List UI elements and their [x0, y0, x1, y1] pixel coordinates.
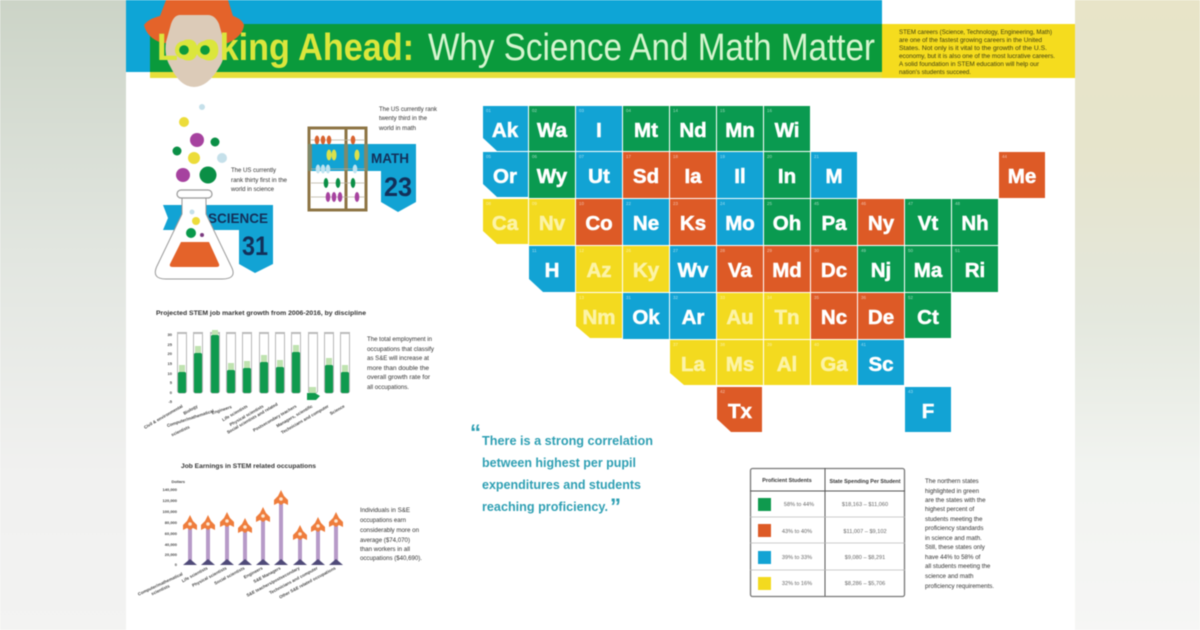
table caption: have 44% to 58% of: [925, 554, 981, 561]
tile: Oh: 25: [767, 201, 772, 206]
chart: earnings rockets: Technicians and computer: [268, 565, 319, 595]
math caption: world in math: [378, 125, 417, 132]
tile: Ma: [905, 246, 951, 292]
bar chart: job growth test tubes: Physical scientists: [229, 403, 265, 427]
left page margin: [0, 0, 126, 630]
earnings caption: Individuals in S&E: [360, 507, 410, 514]
tile: Md: 29: [767, 248, 772, 253]
bar chart: job growth test tubes: 25: [168, 342, 173, 347]
pull quote: expenditures and students: [482, 478, 641, 492]
bar chart: job growth test tubes: 0: [170, 390, 173, 395]
tile: Ca: 08: [486, 201, 491, 206]
tile: Sc: Sc: [868, 353, 894, 376]
tile: Dc: [811, 246, 857, 292]
chart: earnings rockets: 80,000: [165, 520, 178, 525]
tile: Wv: Wv: [678, 259, 709, 282]
bar chart: job growth test tubes: Postsecondary teachers: [252, 403, 298, 433]
tile: Me: 44: [1002, 154, 1007, 159]
tile: De: 36: [861, 295, 866, 300]
tile: Me: [999, 152, 1045, 198]
table caption: science and math: [925, 573, 974, 580]
table caption: highlighted in green: [925, 488, 980, 495]
tile: Ms: Ms: [726, 353, 754, 376]
tile: Ok: [623, 293, 669, 339]
earnings caption: [360, 507, 422, 562]
pull quote: reaching proficiency.: [482, 500, 608, 514]
tile: Ky: [623, 246, 669, 292]
science caption: rank thirty first in the: [231, 177, 288, 184]
tile: Mn: [717, 106, 763, 151]
tile: Ok: Ok: [632, 306, 660, 329]
icon: abacus: [308, 128, 368, 210]
tile: Ut: Ut: [588, 165, 610, 188]
chart: earnings rockets: 120,000: [163, 498, 178, 503]
tile: Nj: 49: [861, 248, 866, 253]
tile: Nj: [858, 246, 904, 292]
pull quote: [470, 420, 653, 519]
math caption: [378, 106, 438, 132]
tile: Ks: 23: [673, 201, 678, 206]
icon: bubbling flask: [155, 104, 233, 279]
chart: earnings rockets: Social scientists: [213, 565, 246, 586]
science ribbon: SCIENCE: [208, 210, 268, 226]
chart: earnings rockets: S&E teachers/postsecondary: [246, 565, 301, 598]
intro text: are one of the fastest growing careers in the United: [899, 37, 1042, 44]
tile: Ga: [811, 340, 857, 385]
tile: Va: 28: [720, 248, 725, 253]
tile: M: [811, 152, 857, 198]
tile: La: La: [681, 353, 706, 376]
tile: Ak: 01: [486, 108, 491, 113]
table: proficiency and spending: Proficient Students: [762, 478, 812, 484]
chart: earnings rockets: Life scientists: [181, 565, 209, 583]
table caption: proficiency standards: [925, 525, 983, 532]
tile: Al: 39: [767, 342, 772, 347]
chart: earnings rockets: S&E Managers: [253, 565, 282, 584]
tile: Or: 05: [486, 154, 491, 159]
tile: Ne: Ne: [633, 212, 659, 235]
table caption: proficiency requirements.: [925, 583, 994, 590]
tile: Nv: 09: [532, 201, 537, 206]
tile: Mn: Mn: [725, 119, 755, 142]
tile: Ny: Ny: [868, 212, 895, 235]
table: proficiency and spending: [750, 468, 905, 596]
tile: Nd: 14: [673, 108, 678, 113]
table caption: Still, these states only: [925, 544, 986, 551]
tile: Wy: Wy: [537, 165, 568, 188]
intro text: STEM careers (Science, Technology, Engineering, Math): [899, 29, 1052, 36]
tile: Nc: Nc: [821, 306, 847, 329]
math ribbon: 23: [384, 172, 412, 202]
right page margin: [1075, 0, 1200, 630]
tile: Nm: [576, 293, 622, 338]
tile: Wy: [529, 152, 575, 198]
tile: M: 21: [814, 154, 819, 159]
tile: I: I: [596, 119, 602, 142]
tile: Ar: 32: [673, 295, 678, 300]
bar chart: job growth test tubes: [143, 330, 350, 437]
tile: Dc: Dc: [821, 259, 847, 282]
earnings caption: occupations ($40,690).: [360, 555, 422, 562]
tile: Ar: [670, 293, 716, 339]
tile: Mt: Mt: [634, 119, 658, 142]
tile: Dc: 30: [814, 248, 819, 253]
job growth caption: overall growth rate for: [367, 374, 430, 381]
tile: Pa: Pa: [821, 212, 847, 235]
header banner: [126, 0, 1075, 78]
tile: Ga: Ga: [820, 353, 848, 376]
tile: Pa: 45: [814, 201, 819, 206]
tile: Ny: [858, 199, 904, 245]
tile: Sc: [858, 340, 904, 385]
table: proficiency and spending: 39% to 33%: [782, 555, 812, 561]
tile: Ma: Ma: [914, 259, 943, 282]
icon: scientist head: [144, 0, 244, 87]
bar chart: job growth test tubes: Social scientists and related: [226, 401, 279, 435]
tile: F: 43: [908, 389, 913, 394]
tile: Az: [576, 246, 622, 292]
tile: Oh: Oh: [773, 212, 801, 235]
tile: Ak: Ak: [492, 119, 519, 142]
pull quote: ”: [610, 494, 621, 519]
tile: Al: Al: [777, 353, 797, 376]
tile: Nc: [811, 293, 857, 339]
math ribbon: MATH: [371, 150, 409, 166]
tile: Az: 12: [579, 248, 584, 253]
job growth caption: more than double the: [367, 365, 430, 372]
tile: Vt: 47: [908, 201, 913, 206]
bar chart: job growth test tubes: Computer/mathematical: [166, 408, 214, 428]
tile: Nj: Nj: [871, 259, 891, 282]
bar chart: job growth test tubes: Technicians and computer: [280, 403, 330, 435]
tile: Co: 10: [579, 201, 584, 206]
math caption: The US currently rank: [379, 106, 438, 113]
intro text: nation's students succeed.: [899, 69, 971, 76]
tile: Ar: Ar: [682, 306, 704, 329]
chart: earnings rockets: 140,000: [163, 487, 178, 492]
science caption: world in science: [230, 186, 275, 193]
tile: Oh: [764, 199, 810, 245]
tile: Ks: Ks: [680, 212, 706, 235]
tile: Ok: 31: [626, 295, 631, 300]
tile: La: [670, 340, 716, 385]
tile: H: 11: [532, 248, 537, 253]
tile: Vt: Vt: [918, 212, 938, 235]
tile: Ga: 40: [814, 342, 819, 347]
math ribbon: [311, 144, 416, 212]
tile: Ky: 26: [626, 248, 631, 253]
tile: Nv: Nv: [539, 212, 566, 235]
bar chart: job growth test tubes: scientists: [170, 424, 191, 437]
bar chart: job growth test tubes: Life scientists: [221, 403, 249, 422]
table caption: The northern states: [925, 478, 979, 485]
math caption: twenty third in the: [379, 115, 428, 122]
tile: Ia: [670, 152, 716, 198]
tile: Au: 33: [720, 295, 725, 300]
tile: Ia: 18: [673, 154, 678, 159]
bar chart: job growth test tubes: 20: [168, 351, 173, 356]
table: proficiency and spending: $18,163 – $11,060: [842, 502, 888, 508]
tile: F: [905, 387, 951, 432]
science caption: [230, 167, 288, 193]
tile: Or: [483, 152, 528, 197]
states periodic table map: [483, 106, 1045, 432]
tile: Ky: Ky: [633, 259, 660, 282]
tile: Co: Co: [585, 212, 613, 235]
tile: Al: [764, 340, 810, 385]
tile: Ny: 46: [861, 201, 866, 206]
tile: Wa: Wa: [537, 119, 568, 142]
icon: scientist glasses: [175, 41, 214, 59]
tile: Sd: 17: [626, 154, 631, 159]
tile: Ct: [905, 293, 951, 338]
job growth chart title: Projected STEM job market growth from 2006-2016, by discipline: [156, 310, 366, 317]
tile: H: [529, 246, 575, 292]
tile: H: H: [545, 259, 559, 282]
bar chart: job growth test tubes: 10: [168, 371, 173, 376]
tile: Ri: 51: [955, 248, 960, 253]
tile: Mt: [623, 106, 669, 151]
chart: earnings rockets: Computer/mathematical: [137, 571, 183, 597]
bar chart: job growth test tubes: Civil & environmental: [143, 404, 184, 430]
tile: Nh: Nh: [961, 212, 989, 235]
chart: earnings rockets: 60,000: [165, 531, 178, 536]
tile: Md: [764, 246, 810, 292]
tile: Wa: [529, 106, 575, 151]
tile: Ct: Ct: [917, 306, 939, 329]
tile: Ne: 22: [626, 201, 631, 206]
table caption: are the states with the: [925, 497, 986, 504]
job growth caption: [367, 336, 435, 391]
earnings caption: occupations earn: [360, 517, 407, 524]
tile: Vt: [905, 199, 951, 245]
tile: Va: [717, 246, 763, 292]
tile: La: 37: [673, 342, 678, 347]
tile: Wa: 02: [532, 108, 537, 113]
tile: De: [858, 293, 904, 339]
chart: earnings rockets: 100,000: [163, 509, 178, 514]
title continuation: Why Science And Math Matter: [428, 27, 875, 69]
bar chart: job growth test tubes: Engineers: [211, 404, 233, 415]
title: Looking Ahead:: [157, 27, 414, 69]
tile: Mo: [717, 199, 763, 245]
tile: Ms: [717, 340, 763, 385]
tile: Ms: 38: [720, 342, 725, 347]
tile: Ma: 50: [908, 248, 913, 253]
earnings caption: average ($74,070): [360, 537, 410, 544]
tile: Tn: [764, 293, 810, 339]
bar chart: job growth test tubes: 5: [170, 380, 173, 385]
chart: earnings rockets: Other S&E related occupations: [278, 565, 337, 600]
tile: Nm: 13: [579, 295, 584, 300]
tile: Wi: 16: [767, 108, 772, 113]
tile: Il: 19: [720, 154, 725, 159]
tile: Nh: 48: [955, 201, 960, 206]
tile: Ut: 07: [579, 154, 584, 159]
tile: Tx: [717, 387, 762, 432]
table caption: highest percent of: [925, 506, 974, 513]
table: proficiency and spending: 32% to 16%: [782, 581, 812, 587]
tile: Ks: [670, 199, 716, 245]
table caption: students meeting the: [925, 516, 983, 523]
chart: earnings rockets: [137, 479, 343, 600]
chart: earnings rockets: 20,000: [165, 552, 178, 557]
tile: Tx: 42: [720, 389, 725, 394]
tile: Wi: [764, 106, 810, 151]
earnings caption: than workers in all: [360, 546, 410, 553]
pull quote: There is a strong correlation: [482, 434, 653, 448]
bar chart: job growth test tubes: 30: [168, 332, 173, 337]
bar chart: job growth test tubes: Managers, scientific: [275, 403, 314, 428]
earnings caption: considerably more on: [360, 527, 420, 534]
table: proficiency and spending: $9,080 – $8,291: [845, 555, 885, 561]
tile: Mo: 24: [720, 201, 725, 206]
table caption: [925, 478, 994, 590]
table: proficiency and spending: $8,286 – $5,706: [845, 581, 885, 587]
tile: Or: Or: [493, 165, 517, 188]
intro text: A solid foundation in STEM education will help our: [899, 61, 1039, 68]
tile: De: De: [868, 306, 894, 329]
tile: Mo: Mo: [725, 212, 755, 235]
tile: Ri: Ri: [965, 259, 985, 282]
science ribbon: 31: [242, 231, 268, 261]
tile: Wv: [670, 246, 716, 292]
tile: In: [764, 152, 810, 198]
bar chart: job growth test tubes: 15: [168, 361, 173, 366]
job growth caption: as S&E will increase at: [367, 355, 429, 362]
bar chart: job growth test tubes: Biology: [182, 403, 199, 416]
tile: Nd: [670, 106, 716, 151]
tile: I: 03: [579, 108, 584, 113]
chart: earnings rockets: 0: [175, 562, 178, 567]
table: proficiency and spending: 58% to 44%: [784, 502, 814, 508]
tile: Ca: Ca: [492, 212, 519, 235]
job growth caption: The total employment in: [367, 336, 433, 343]
intro text: economy, but it is also one of the most lucrative careers.: [899, 53, 1055, 60]
intro text: [899, 29, 1055, 76]
science ribbon: [163, 205, 273, 273]
bar chart: job growth test tubes: -5: [168, 399, 173, 404]
table caption: all students meeting the: [925, 563, 991, 570]
tile: Pa: [811, 199, 857, 245]
tile: Va: Va: [728, 259, 753, 282]
bar chart: job growth test tubes: Science: [329, 403, 346, 416]
chart: earnings rockets: Dollars: [171, 479, 186, 484]
tile: Ia: Ia: [684, 165, 702, 188]
tile: Au: Au: [726, 306, 754, 329]
earnings chart title: Job Earnings in STEM related occupations: [181, 463, 316, 470]
table: proficiency and spending: 43% to 40%: [782, 529, 812, 535]
job growth caption: all occupations.: [367, 384, 409, 391]
tile: Ut: [576, 152, 622, 198]
tile: Nc: 35: [814, 295, 819, 300]
tile: In: In: [778, 165, 796, 188]
science caption: The US currently: [231, 167, 277, 174]
table: proficiency and spending: $11,007 – $9,102: [843, 529, 887, 535]
intro text: States. Not only is it vital to the growth of the U.S.: [899, 45, 1047, 52]
tile: F: F: [922, 400, 934, 423]
pull quote: between highest per pupil: [482, 456, 636, 470]
tile: Nh: [952, 199, 998, 245]
tile: Sd: [623, 152, 669, 198]
tile: Md: Md: [772, 259, 802, 282]
tile: Tx: Tx: [728, 400, 753, 423]
chart: earnings rockets: Physical scientists: [191, 565, 228, 588]
tile: Ak: [483, 106, 528, 151]
tile: Ne: [623, 199, 669, 245]
pull quote: “: [470, 420, 481, 445]
tile: Wi: Wi: [775, 119, 799, 142]
tile: Au: [717, 293, 763, 339]
tile: In: 20: [767, 154, 772, 159]
table caption: in science and math.: [925, 535, 982, 542]
tile: Co: [576, 199, 622, 245]
tile: Tn: Tn: [774, 306, 800, 329]
tile: Az: Az: [586, 259, 612, 282]
tile: M: M: [825, 165, 843, 188]
tile: Nm: Nm: [582, 306, 616, 329]
tile: Ct: 52: [908, 295, 913, 300]
tile: Sd: Sd: [633, 165, 659, 188]
tile: Me: Me: [1008, 165, 1036, 188]
tile: Nd: Nd: [679, 119, 707, 142]
chart: earnings rockets: Engineers: [243, 565, 264, 580]
tile: Il: Il: [734, 165, 746, 188]
tile: Tn: 34: [767, 295, 772, 300]
job growth caption: occupations that classify: [367, 346, 435, 353]
tile: Mn: 15: [720, 108, 725, 113]
tile: Ri: [952, 246, 998, 292]
tile: Sc: 41: [861, 342, 866, 347]
chart: earnings rockets: scientists: [150, 583, 171, 596]
chart: earnings rockets: 40,000: [165, 542, 178, 547]
tile: Wy: 06: [532, 154, 537, 159]
tile: Nv: [529, 199, 575, 245]
tile: I: [576, 106, 622, 151]
tile: Il: [717, 152, 763, 198]
tile: Wv: 27: [673, 248, 678, 253]
table: proficiency and spending: State Spending Per Student: [830, 479, 901, 485]
tile: Mt: 04: [626, 108, 631, 113]
tile: Ca: [483, 199, 528, 244]
